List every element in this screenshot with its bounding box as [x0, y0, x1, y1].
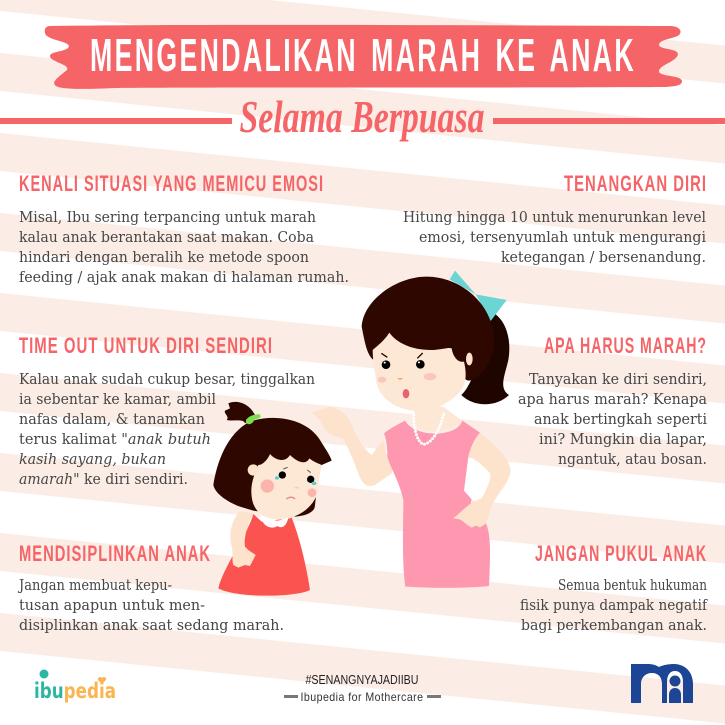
section: time out: kasih sayang, bukan — [19, 450, 166, 468]
section: jangan pukul anak: bagi perkembangan anak. — [521, 616, 707, 634]
section: kenali situasi: kalau anak berantakan saat makan. Coba — [19, 228, 314, 246]
section: time out: terus kalimat "anak butuh — [19, 430, 211, 448]
subtitle text: Selama Berpuasa — [240, 91, 484, 142]
credit line: Ibupedia for Mothercare — [300, 690, 424, 704]
section: kenali situasi: Misal, Ibu sering terpancing untuk marah — [19, 208, 316, 226]
section: mendisiplinkan anak: tusan apapun untuk men- — [19, 596, 205, 614]
section: time out: TIME OUT UNTUK DIRI SENDIRI — [19, 333, 273, 358]
section: apa harus marah: anak bertingkah seperti — [534, 410, 707, 428]
section: mendisiplinkan anak — [17, 541, 284, 634]
section: apa harus marah: Tanyakan ke diri sendiri, — [529, 370, 707, 388]
section: tenangkan diri: Hitung hingga 10 untuk menurunkan level — [403, 208, 706, 226]
section: tenangkan diri: emosi, tersenyumlah untuk mengurangi — [419, 228, 706, 246]
section: time out: amarah" ke diri sendiri. — [19, 470, 188, 488]
section: mendisiplinkan anak: MENDISIPLINKAN ANAK — [19, 541, 211, 566]
logo: ibupedia: ibupedia — [34, 679, 116, 703]
section: tenangkan diri: ketegangan / bersenandung. — [501, 248, 706, 266]
section: kenali situasi — [19, 171, 349, 286]
illustration: child — [213, 402, 332, 596]
section: tenangkan diri — [403, 171, 707, 266]
section: jangan pukul anak: fisik punya dampak negatif — [520, 596, 708, 614]
logo: mothercare — [631, 664, 693, 703]
section: mendisiplinkan anak: disiplinkan anak saat sedang marah. — [19, 616, 284, 634]
subtitle with rules — [0, 91, 725, 142]
section: apa harus marah: ngantuk, atau bosan. — [558, 450, 707, 468]
section: kenali situasi: hindari dengan beralih ke metode spoon — [19, 248, 309, 266]
section: time out — [19, 333, 315, 488]
section: time out: nafas dalam, & tanamkan — [19, 410, 205, 428]
section: jangan pukul anak — [520, 541, 708, 634]
section: kenali situasi: feeding / ajak anak makan di halaman rumah. — [19, 268, 349, 286]
hashtag: #SENANGNYAJADIIBU — [306, 672, 418, 687]
logo: ibupedia — [34, 670, 116, 703]
section: apa harus marah — [518, 333, 707, 468]
section: apa harus marah: apa harus marah? Kenapa — [518, 390, 707, 408]
section: time out: Kalau anak sudah cukup besar, tinggalkan — [19, 370, 315, 388]
section: apa harus marah: ini? Mungkin dia lapar, — [539, 430, 707, 448]
section: time out: ia sebentar ke kamar, ambil — [19, 390, 216, 408]
title banner — [45, 25, 682, 89]
section: kenali situasi: KENALI SITUASI YANG MEMICU EMOSI — [19, 171, 324, 196]
section: mendisiplinkan anak: Jangan membuat kepu- — [17, 576, 172, 594]
illustration: mother — [312, 271, 511, 588]
